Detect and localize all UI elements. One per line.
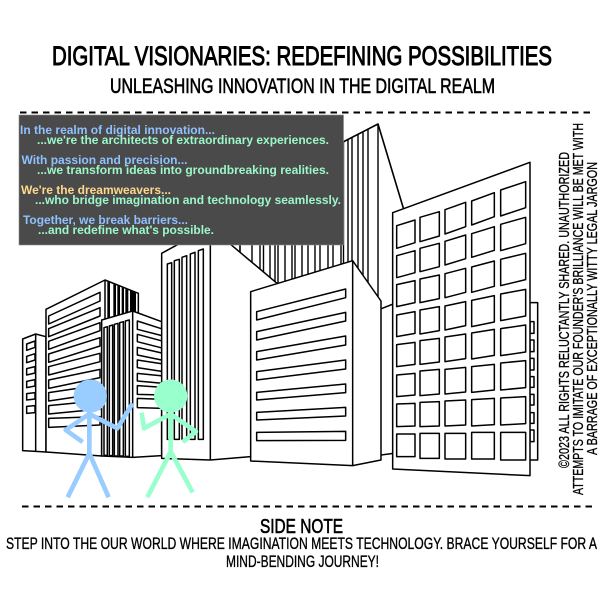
figure: blue stick person <box>66 379 133 497</box>
building: centre tower with vertical windows <box>162 243 277 460</box>
building: front centre block <box>251 261 393 466</box>
text: line pair 1: ...we're the architects of extraordinary experiences. <box>37 133 329 147</box>
text: line pair 2 <box>22 153 329 177</box>
illustration: city skyline <box>23 124 538 476</box>
side note text: MIND-BENDING JOURNEY! <box>226 552 379 571</box>
building: far right small tower <box>527 303 538 460</box>
text: line pair 1 <box>20 123 329 147</box>
panel: dark text box <box>19 115 344 245</box>
building: tall striped tower <box>240 124 403 310</box>
text: line pair 4: ...and redefine what's possible. <box>38 223 214 237</box>
copyright note (vertical) <box>557 123 601 495</box>
text: line pair 2: ...we transform ideas into groundbreaking realities. <box>37 163 329 177</box>
text: line pair 1: In the realm of digital innovation... <box>20 123 215 137</box>
text: line pair 3: We're the dreamweavers... <box>21 183 171 197</box>
copyright note (vertical): ATTEMPTS TO IMITATE OUR FOUNDER'S BRILLIANCE WILL BE MET WITH <box>571 123 587 495</box>
building: mid-left block <box>102 311 163 457</box>
copyright note (vertical): A BARRAGE OF EXCEPTIONALLY WITTY LEGAL JARGON <box>585 162 601 455</box>
text: line pair 3: ...who bridge imagination and technology seamlessly. <box>35 193 341 207</box>
building: far left tower <box>23 334 46 452</box>
building: right grid-window tower <box>393 162 530 476</box>
figure: green stick person <box>142 379 196 497</box>
copyright note (vertical): ©2023 ALL RIGHTS RELUCTANTLY SHARED. UNAUTHORIZED <box>557 152 573 468</box>
text: line pair 2: With passion and precision... <box>22 153 188 167</box>
side note text <box>6 534 597 571</box>
text: line pair 4: Together, we break barriers... <box>23 213 188 227</box>
building: slatted office block <box>46 280 138 456</box>
subtitle: UNLEASHING INNOVATION IN THE DIGITAL REALM <box>110 75 495 98</box>
text: line pair 3 <box>21 183 341 207</box>
side note heading: SIDE NOTE <box>260 516 343 538</box>
text: line pair 4 <box>23 213 214 237</box>
